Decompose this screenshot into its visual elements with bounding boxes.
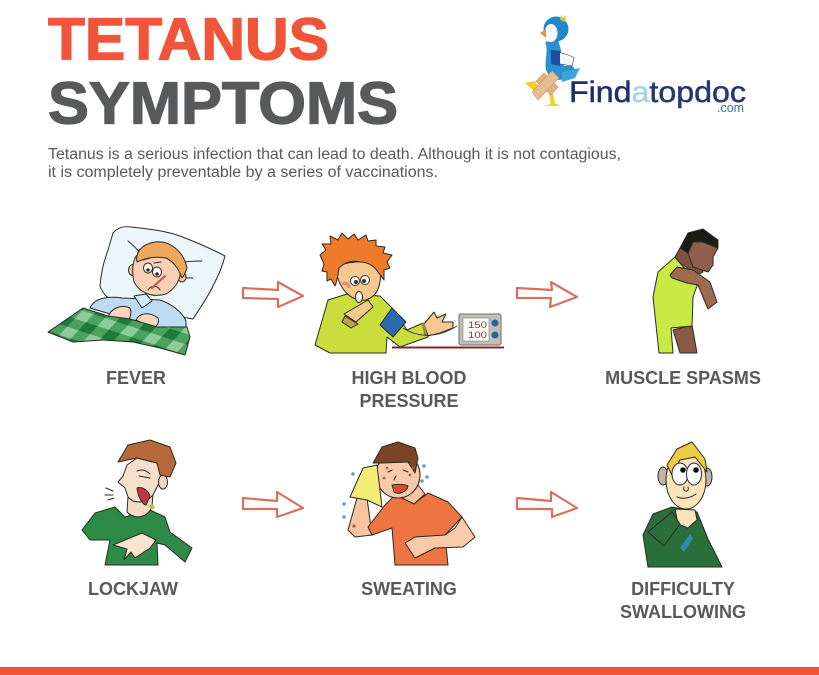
- icon: man with blood pressure monitor: 150: [468, 320, 487, 331]
- footer bar: [0, 667, 819, 675]
- title: SYMPTOMS: [48, 70, 398, 136]
- icon: bird mascot: [525, 15, 580, 106]
- arrow: [243, 492, 303, 517]
- logo: Findatopdoc: [525, 15, 746, 115]
- icon: man with lockjaw: [82, 440, 192, 565]
- panel: lockjaw: [82, 440, 192, 599]
- label: [620, 579, 746, 622]
- title: [48, 6, 398, 136]
- label: LOCKJAW: [88, 579, 178, 599]
- arrow: [243, 282, 303, 307]
- blanket: [48, 308, 190, 355]
- icon: man sweating: [342, 442, 475, 565]
- intro text: [48, 146, 621, 181]
- panel: difficulty swallowing: [620, 442, 746, 622]
- panel: fever: [48, 227, 225, 388]
- panel: sweating: [342, 442, 475, 599]
- hand: [113, 533, 156, 560]
- panel: high blood pressure: [315, 233, 504, 411]
- icon: man holding shoulder: [653, 229, 718, 353]
- icon: man with blood pressure monitor: 100: [468, 330, 487, 341]
- monitor: [459, 314, 501, 345]
- intro text: it is completely preventable by a series of vaccinations.: [48, 164, 438, 181]
- hands: [108, 306, 159, 328]
- logo wordmark: Findatopdoc: [569, 76, 746, 109]
- label: SWALLOWING: [620, 602, 746, 622]
- arrow: [517, 492, 577, 517]
- logo suffix: .com: [717, 101, 744, 115]
- title: TETANUS: [48, 6, 329, 72]
- label: PRESSURE: [359, 391, 459, 411]
- label: HIGH BLOOD: [352, 368, 466, 388]
- intro text: Tetanus is a serious infection that can lead to death. Although it is not contagious,: [48, 146, 621, 163]
- label: SWEATING: [361, 579, 457, 599]
- table: [392, 346, 504, 348]
- label: DIFFICULTY: [631, 579, 735, 599]
- icon: man touching throat: [643, 442, 722, 567]
- arrow: [517, 282, 577, 307]
- panel: muscle spasms: [605, 229, 761, 388]
- icon: boy in bed: [48, 227, 225, 355]
- icon: man with blood pressure monitor: [315, 233, 504, 353]
- label: [352, 368, 466, 411]
- label: MUSCLE SPASMS: [605, 368, 761, 388]
- label: FEVER: [106, 368, 166, 388]
